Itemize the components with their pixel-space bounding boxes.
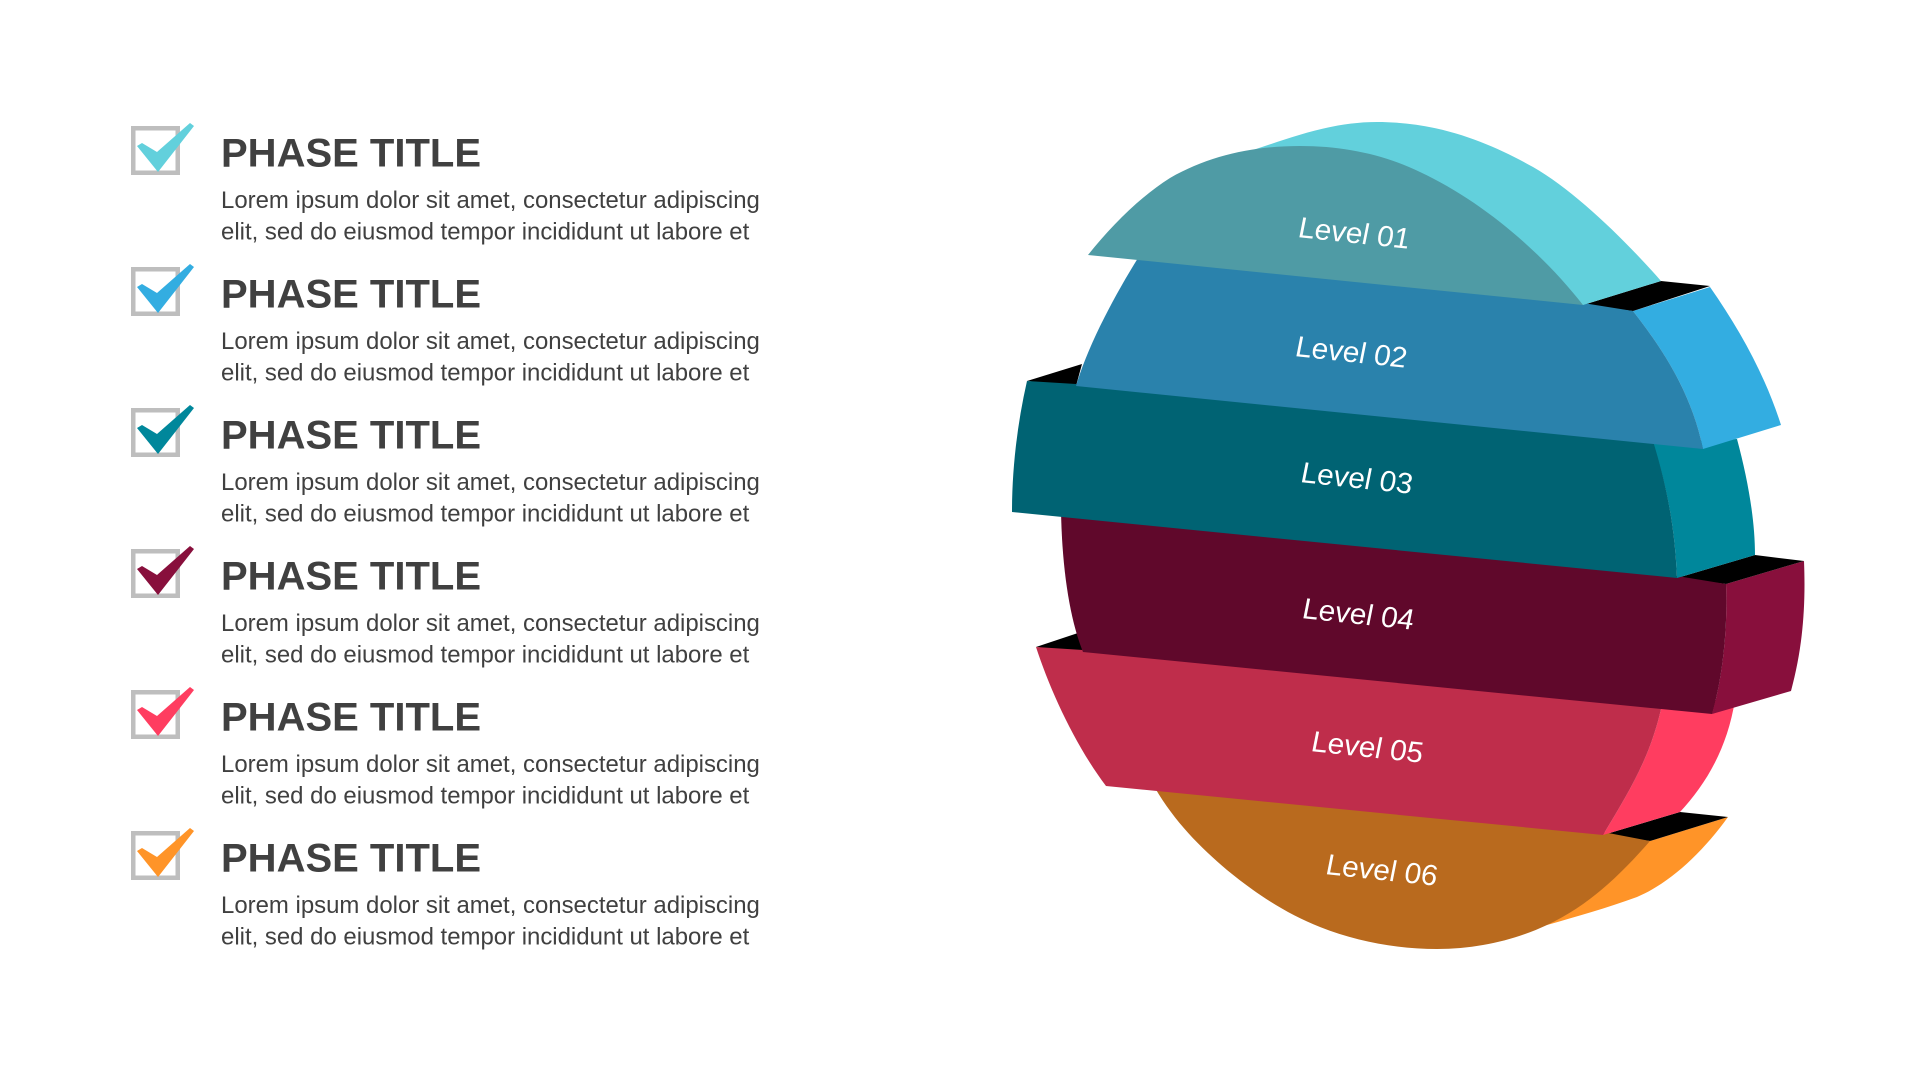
phase 2 text: elit, sed do eiusmod tempor incididunt ut labore et xyxy=(221,360,750,386)
phase 2 heading: PHASE TITLE xyxy=(221,272,481,316)
phase 4 text: Lorem ipsum dolor sit amet, consectetur adipiscing xyxy=(221,610,760,637)
phase list xyxy=(133,123,760,950)
icon: checkbox 5 xyxy=(133,687,194,737)
level 4 slice: Level 04 xyxy=(1302,592,1414,637)
level 3 slice: Level 03 xyxy=(1301,456,1413,501)
level 4 slice xyxy=(1061,510,1804,714)
phase 2 xyxy=(133,264,760,386)
level 3 slice xyxy=(1012,364,1755,578)
icon: checkbox 3 xyxy=(133,405,194,455)
phase 5 xyxy=(133,687,760,810)
level 6 slice: Level 06 xyxy=(1326,848,1438,893)
level 5 slice: Level 05 xyxy=(1311,725,1423,770)
phase 1 text: Lorem ipsum dolor sit amet, consectetur adipiscing xyxy=(221,187,760,214)
icon: checkbox 2 xyxy=(133,264,194,314)
phase 1 xyxy=(133,123,760,246)
phase 6 text: elit, sed do eiusmod tempor incididunt ut labore et xyxy=(221,924,750,950)
phase 6 text: Lorem ipsum dolor sit amet, consectetur adipiscing xyxy=(221,892,760,919)
phase 4 text: elit, sed do eiusmod tempor incididunt ut labore et xyxy=(221,642,750,668)
level 1 slice xyxy=(1088,122,1661,305)
phase 6 xyxy=(133,828,760,950)
phase 3 text: Lorem ipsum dolor sit amet, consectetur adipiscing xyxy=(221,469,760,496)
phase 5 text: Lorem ipsum dolor sit amet, consectetur adipiscing xyxy=(221,751,760,778)
level 5 slice xyxy=(1036,633,1735,835)
level 1 slice: Level 01 xyxy=(1298,211,1410,256)
level 2 slice: Level 02 xyxy=(1295,330,1407,375)
phase 3 heading: PHASE TITLE xyxy=(221,414,481,458)
phase 1 heading: PHASE TITLE xyxy=(221,132,481,176)
icon: checkbox 6 xyxy=(133,828,194,878)
phase 6 heading: PHASE TITLE xyxy=(221,836,481,880)
phase 4 xyxy=(133,546,760,668)
phase 5 text: elit, sed do eiusmod tempor incididunt ut labore et xyxy=(221,782,750,810)
sliced sphere diagram xyxy=(1012,122,1804,949)
phase 1 text: elit, sed do eiusmod tempor incididunt ut labore et xyxy=(221,218,750,246)
phase 3 xyxy=(133,405,760,528)
phase 5 heading: PHASE TITLE xyxy=(221,696,481,740)
phase 2 text: Lorem ipsum dolor sit amet, consectetur adipiscing xyxy=(221,328,760,355)
level 6 slice xyxy=(1155,788,1728,949)
phase 3 text: elit, sed do eiusmod tempor incididunt ut labore et xyxy=(221,500,750,528)
phase 4 heading: PHASE TITLE xyxy=(221,554,481,598)
icon: checkbox 4 xyxy=(133,546,194,596)
icon: checkbox 1 xyxy=(133,123,194,173)
level 2 slice xyxy=(1076,258,1781,449)
